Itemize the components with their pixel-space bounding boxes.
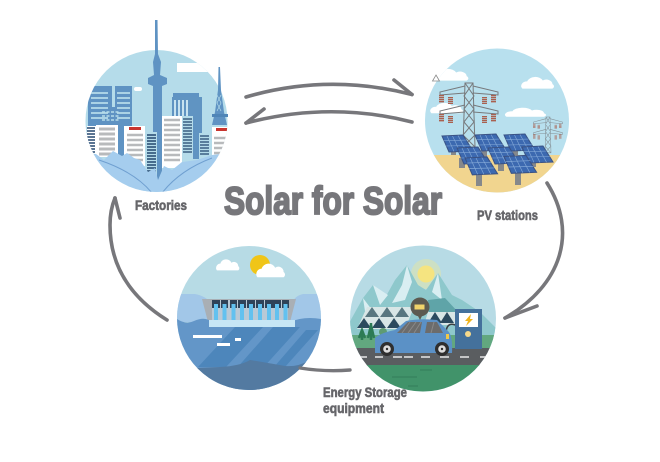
factories sky background: [86, 50, 228, 192]
label: Energy Storage equipment: Energy Storage: [323, 384, 407, 400]
dam sky background: [177, 246, 321, 390]
car: [375, 319, 452, 353]
icon: sun: [250, 255, 270, 275]
label: PV stations: PV stations: [477, 207, 538, 223]
EV sky background: [350, 246, 496, 392]
panel: PV stations circle: [425, 48, 569, 195]
eiffel style tower: [212, 67, 228, 125]
arrow: PV stations to energy storage: [505, 183, 563, 318]
panel: hydro dam circle: [177, 246, 325, 392]
PV sky background: [425, 48, 569, 192]
battery callout: [410, 298, 430, 316]
icon: warning triangle: [432, 75, 440, 81]
arrow: factories to PV stations: [246, 80, 412, 97]
title: Solar for Solar: [224, 180, 442, 223]
panel: energy storage EV circle: [348, 246, 498, 397]
PV stations illustration: [425, 69, 569, 195]
EV charging illustration: [348, 259, 498, 397]
desert ground: [434, 155, 560, 192]
dam illustration: [177, 255, 325, 392]
arrow: energy storage to dam: [300, 368, 350, 371]
solar panel rows: [357, 307, 414, 329]
label: Energy Storage equipment: equipment: [323, 400, 384, 416]
label: Energy Storage equipment: [323, 384, 407, 416]
arrow: dam to factories: [110, 198, 167, 320]
icon: sun: [411, 259, 441, 289]
factories skyline illustration: [85, 63, 230, 200]
label: Factories: Factories: [135, 197, 187, 213]
sky tower rising above the circle: [148, 20, 167, 86]
panel: factories circle: [85, 20, 230, 200]
charging station: [455, 309, 482, 349]
arrow: PV stations to factories: [246, 109, 412, 123]
